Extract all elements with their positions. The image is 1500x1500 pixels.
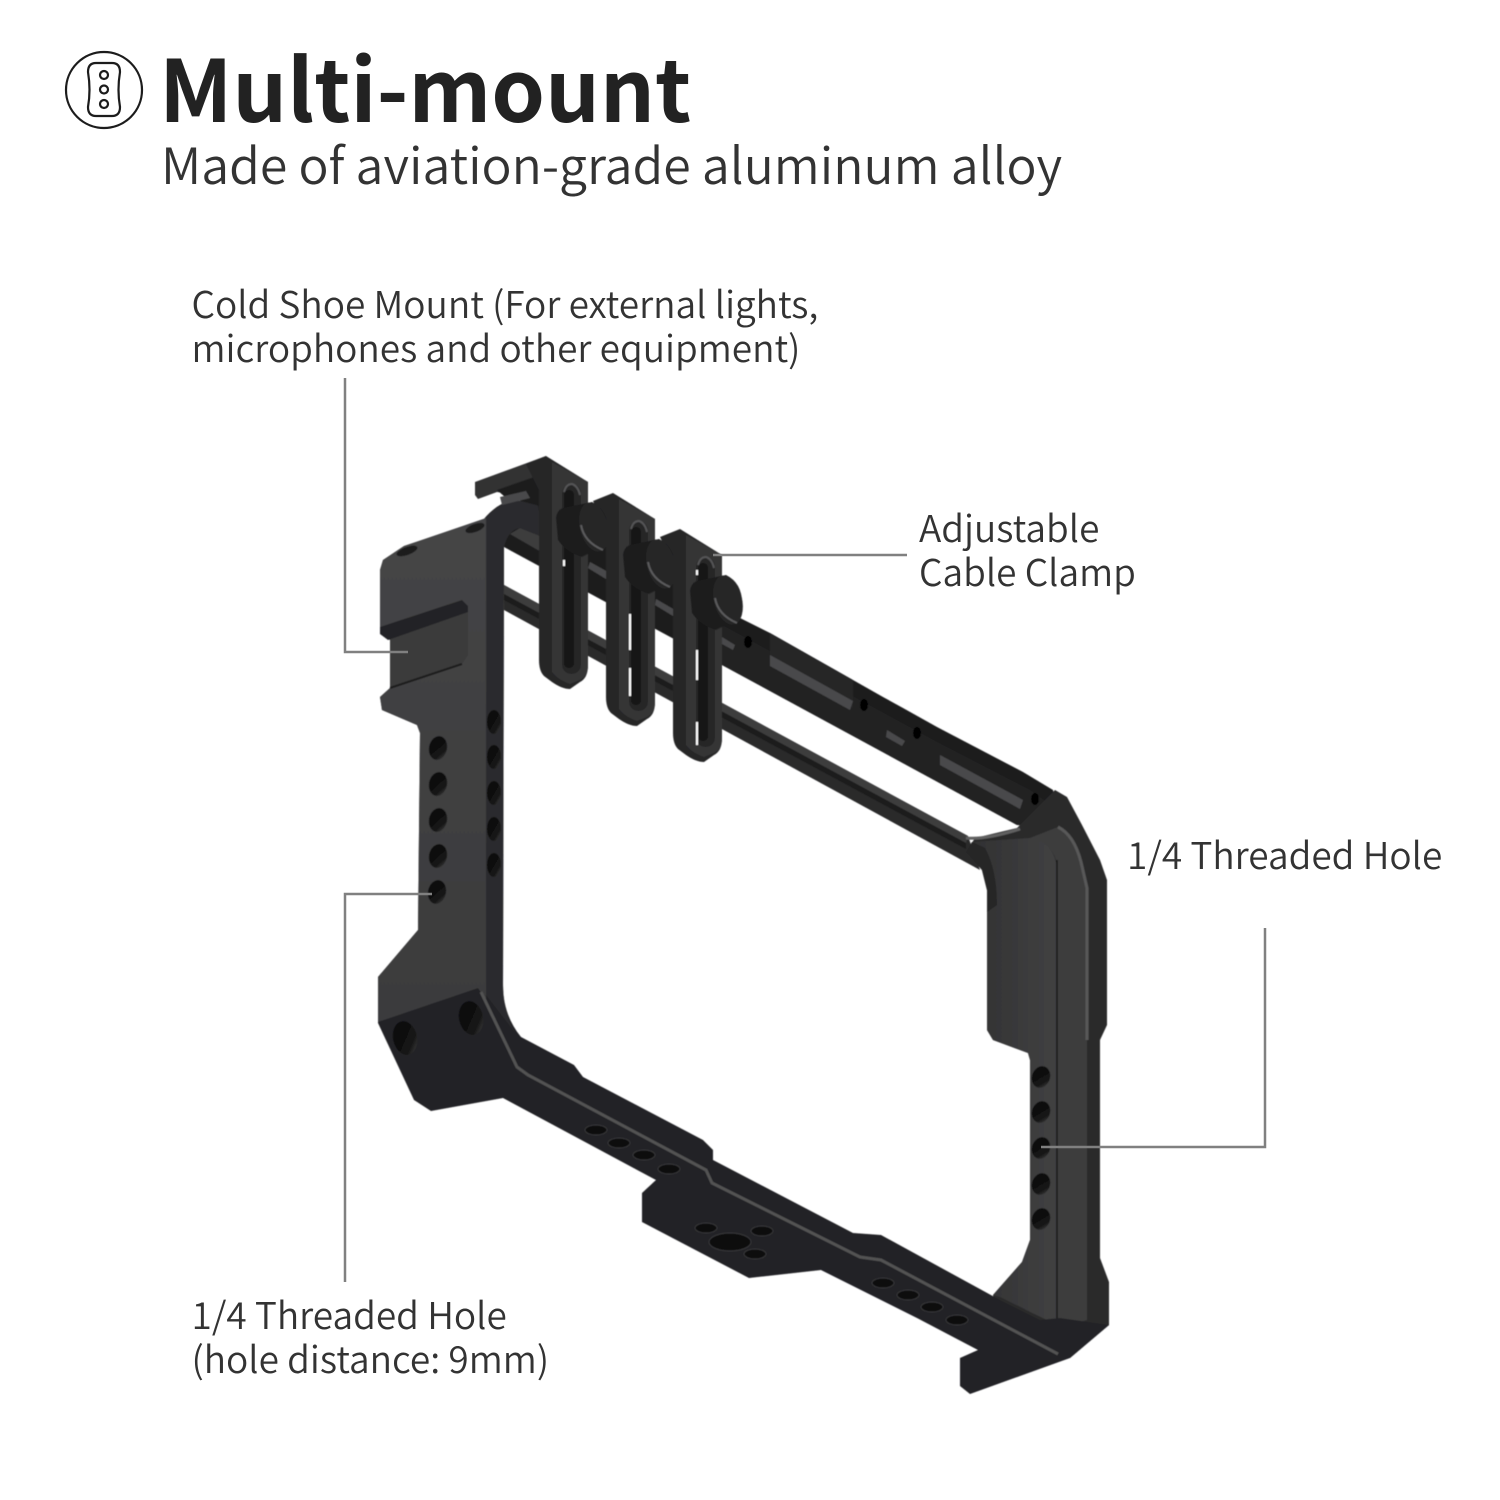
strip holes (487, 710, 501, 734)
top rail (504, 508, 1060, 828)
inner strip (486, 500, 545, 1035)
label: threaded hole left: 1/4 Threaded Hole (192, 1286, 507, 1340)
cold shoe slot (390, 611, 468, 688)
cable clamp hook (475, 456, 552, 506)
label: cold shoe mount: Cold Shoe Mount (For external lights, (192, 275, 818, 329)
highlight line (481, 992, 1058, 1354)
leader: cold shoe mount (345, 378, 408, 652)
product: monitor cage (378, 456, 1109, 1394)
leader: threaded hole left (345, 894, 432, 1282)
lower thin rail (504, 585, 980, 870)
label: adjustable cable clamp: Cable Clamp (919, 543, 1136, 597)
face holes (427, 734, 449, 762)
right upright (966, 790, 1109, 1358)
left column and bottom rail (378, 500, 1109, 1394)
rail holes (585, 1125, 968, 1325)
label: adjustable cable clamp: Adjustable (919, 499, 1099, 553)
label: cold shoe mount: microphones and other equipment) (192, 319, 800, 373)
leader: cable clamp (713, 554, 907, 556)
label: threaded hole right: 1/4 Threaded Hole (1127, 826, 1442, 880)
left column face (378, 518, 486, 1022)
leader: threaded hole right (1041, 928, 1265, 1147)
icon: mount plate (66, 52, 142, 128)
subtitle: Made of aviation-grade aluminum alloy (161, 127, 1062, 199)
title: Multi-mount (159, 22, 691, 147)
top mounting holes (395, 543, 419, 559)
cable clamps (526, 456, 748, 762)
label: threaded hole left: (hole distance: 9mm) (192, 1330, 549, 1384)
block holes (390, 1019, 420, 1057)
